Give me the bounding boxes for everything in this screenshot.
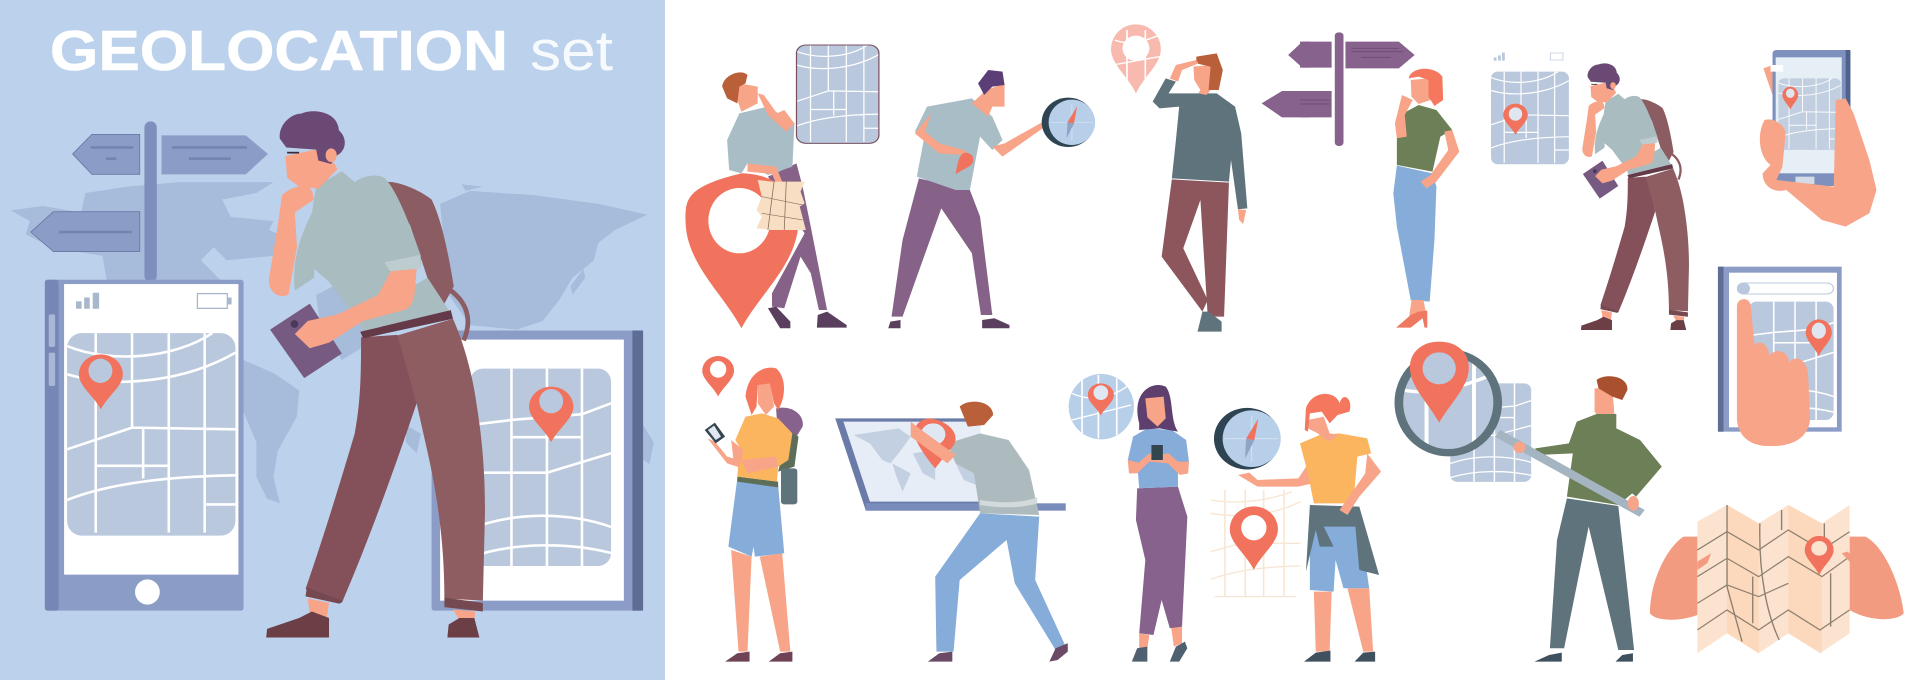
scene: left panel illustration	[11, 111, 654, 638]
map tile	[796, 45, 879, 143]
figure: man in green sweater	[1498, 376, 1662, 662]
hand reaching out	[1238, 460, 1327, 487]
map tile with pin	[1491, 53, 1569, 164]
figure: woman with phone	[1128, 385, 1189, 662]
figure: woman in green shirt	[1393, 69, 1459, 328]
scene: top row, left figures	[686, 24, 1310, 332]
scene: bottom row, right figures	[1300, 267, 1904, 662]
figure: backpacker woman	[705, 368, 803, 662]
world map	[11, 182, 654, 503]
title: GEOLOCATION	[50, 19, 508, 83]
phone with map	[45, 280, 244, 611]
figure: woman with compass	[1300, 394, 1381, 662]
icon: hand on tablet	[1718, 267, 1842, 446]
figure: man with compass	[888, 70, 1095, 328]
icon: beige map with pin	[1211, 490, 1300, 597]
figure: man pinning on laptop world map	[835, 402, 1068, 662]
icon: hand holding phone	[1760, 50, 1876, 227]
scene: top row, right figures	[1300, 32, 1569, 328]
icon: magnifier over map	[1399, 342, 1642, 513]
figure: man in hoodie looking out	[1153, 53, 1247, 332]
figure: thinking man with backpack	[266, 111, 485, 638]
icon: globe with pin	[1069, 374, 1134, 439]
icon: compass	[1214, 408, 1281, 469]
title: set	[530, 19, 613, 83]
signpost	[31, 121, 268, 282]
figure: man leaning on big pin	[686, 72, 847, 328]
scene: bottom row, left figures	[702, 356, 1327, 662]
signpost left arms	[1262, 42, 1310, 117]
purple signpost	[1300, 32, 1415, 146]
map pin	[702, 356, 734, 396]
faded map pin	[1111, 24, 1161, 93]
icon: hands holding folded paper map	[1650, 505, 1904, 653]
figure: thinking man, small copy	[1581, 63, 1689, 330]
panel: left blue background	[0, 0, 665, 680]
tablet with map	[432, 330, 643, 611]
